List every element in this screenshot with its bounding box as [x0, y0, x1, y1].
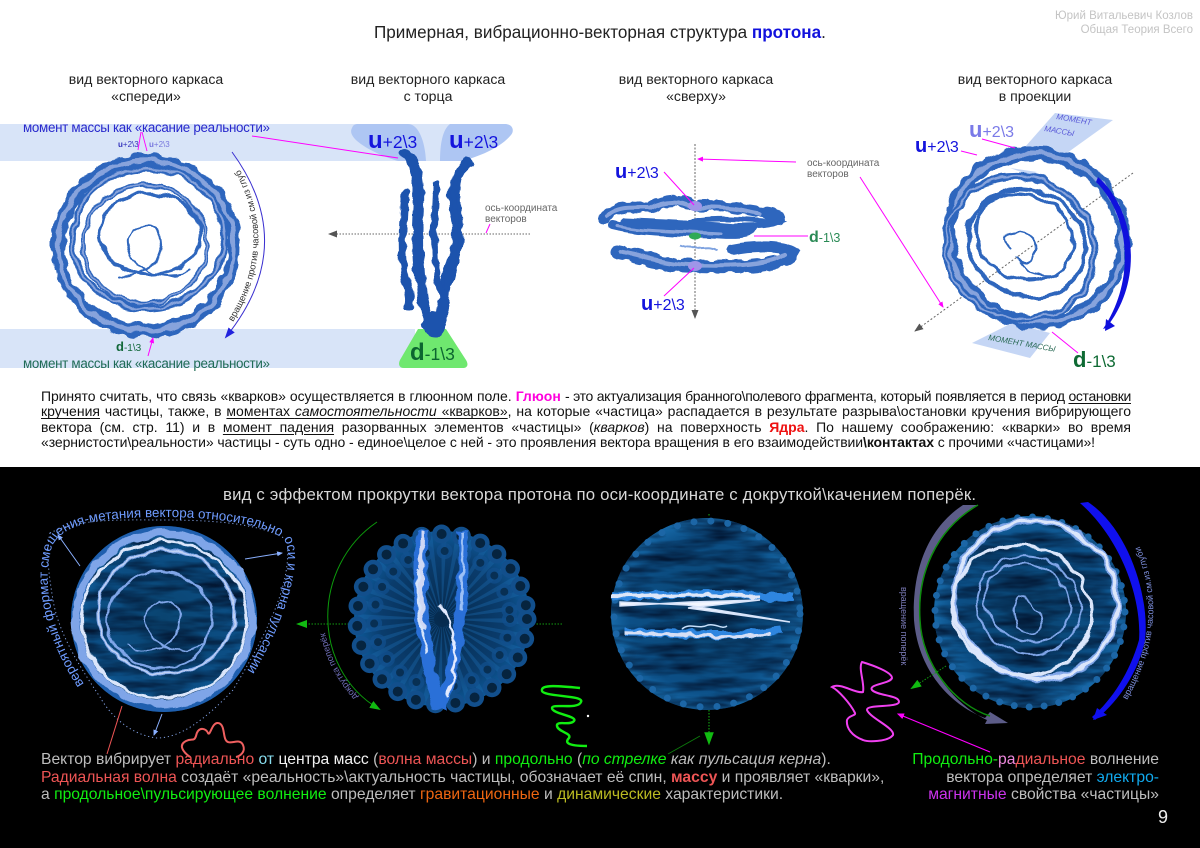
projection-view vector ring [921, 125, 1151, 351]
front-view quark annotations: u+2\3 [118, 140, 139, 149]
projection axis [915, 173, 1133, 331]
green axis arrow sphere 4 [912, 666, 946, 688]
explanatory paragraph: вектора (см. стр. 11) и в момент падения разорванных элементов «частицы» (кварков) на поверхность Ядра. По нашему соображению: «кварки» во время [41, 419, 1131, 435]
top-view quark markers [664, 172, 808, 296]
white dot [587, 715, 589, 717]
author credit [1055, 10, 1193, 36]
projection arrow tip [1105, 319, 1115, 331]
lower right explanation text: вектора определяет электро- [946, 769, 1159, 786]
column headings: с торца [404, 88, 453, 104]
front-view quark annotations: d-1\3 [116, 339, 142, 354]
top-view quark labels: u+2\3 [641, 293, 685, 315]
rotation label sphere 2: докрутка поперёк [320, 632, 360, 699]
side-view axis label [485, 203, 558, 233]
projection quark labels [915, 117, 1116, 372]
explanatory paragraph: «зернистости\реальности» частицы - суть одно - единое\целое с ней - это проявления вектора вращения в его взаимодействии\контактах с прочими «частицами»! [41, 434, 1095, 450]
black lower panel [0, 467, 1200, 848]
explanatory paragraph [41, 388, 1131, 450]
side-view axis [329, 233, 530, 235]
dark panel heading: вид с эффектом прокрутки вектора протона по оси-координате с докруткой\качением поперёк. [223, 485, 976, 504]
lower explanation text [41, 751, 884, 803]
blob: u quark right [440, 124, 513, 161]
top-view axis [694, 144, 696, 318]
projection mass-moment planes [972, 113, 1113, 358]
projection quark labels: u+2\3 [915, 135, 959, 157]
top-view quark labels: u+2\3 [615, 161, 659, 183]
blue rotation arrow sphere 4 [1080, 502, 1146, 720]
horizontal axis sphere 2 [298, 623, 562, 625]
column headings: вид векторного каркаса [958, 71, 1112, 87]
blob: d quark [399, 329, 467, 368]
projection plane labels [988, 112, 1093, 354]
lower right explanation text [912, 751, 1159, 803]
top-view quark labels [615, 161, 840, 315]
side-view vector strands [403, 154, 468, 333]
title: Примерная, вибрационно-векторная структура протона. [374, 23, 826, 42]
blue arrow label: вращение против часовой см.из глубины [1123, 546, 1154, 700]
band label bottom: момент массы как «касание реальности» [23, 356, 270, 371]
author credit: Общая Теория Всего [1081, 24, 1193, 36]
projection quark labels: d-1\3 [1073, 347, 1116, 372]
lower right explanation text: Продольно-радиальное волнение [912, 751, 1159, 768]
blue arrow tip [1093, 708, 1107, 720]
vibration-range pointers [58, 535, 282, 735]
explanatory paragraph: Принято считать, что связь «кварков» осуществляется в глюонном поле. Глюон - это актуализация бранного\полевого фрагмента, который появляется в период остановки [41, 388, 1131, 404]
projection rotation arrow [1096, 177, 1131, 329]
sphere 2: side-view scan [354, 530, 530, 708]
icon: electromagnetic wave [832, 662, 899, 741]
icon: longitudinal wave [542, 686, 587, 746]
front-view rotation arrow [226, 152, 265, 337]
vibration-range arc label: вероятный формат смещения-метания вектора относительно оси и керна пульсации [40, 510, 296, 687]
column headings: «спереди» [111, 88, 181, 104]
blob: u quark left [351, 124, 426, 161]
sphere 1: front-view scan [71, 526, 257, 712]
sphere 3: top-view scan [611, 518, 803, 710]
mass-moment bands [0, 124, 470, 368]
shared axis label with pointers: векторов [807, 169, 849, 180]
top-view quark labels: d-1\3 [809, 229, 840, 246]
shared axis label with pointers [698, 158, 943, 307]
side-view quark labels: u+2\3 [368, 127, 417, 154]
rotation arrow grey [914, 505, 1008, 724]
lower explanation text: Вектор вибрирует радиально от центра масс (волна массы) и продольно (по стрелке как пульсация керна). [41, 751, 831, 768]
column headings: «сверху» [666, 88, 726, 104]
page number: 9 [1158, 807, 1168, 827]
pointer to italic text [668, 736, 700, 754]
column headings: в проекции [999, 88, 1071, 104]
sphere 4: projection scan [929, 495, 1143, 708]
column headings: вид векторного каркаса [351, 71, 505, 87]
rotation arrow around sphere 2 [328, 522, 379, 709]
author credit: Юрий Витальевич Козлов [1055, 10, 1193, 22]
band label top: момент массы как «касание реальности» [23, 120, 270, 135]
column headings: вид векторного каркаса [619, 71, 773, 87]
shared axis label with pointers: ось-координата [807, 158, 880, 169]
top-view vector rings [604, 200, 793, 267]
lower explanation text: а продольное\пульсирующее волнение определяет гравитационные и динамические характеристики. [41, 786, 783, 803]
column headings: вид векторного каркаса [69, 71, 223, 87]
projection plane labels: МОМЕНТ [1056, 112, 1093, 127]
front-view quark annotations: u+2\3 [149, 140, 170, 149]
front-view vector ring [58, 161, 234, 331]
sphere 4 left label: вращение поперёк [899, 587, 909, 665]
explanatory paragraph: кручения частицы, также, в моментах самостоятельности «кварков», на которые «частица» распадается в результате разрыва\остановки кручения вибрирующего [41, 403, 1131, 419]
icon: radial wave [182, 723, 244, 757]
projection plane labels: МАССЫ [1044, 124, 1075, 138]
side-view axis label: векторов [485, 214, 527, 225]
projection plane labels: МОМЕНТ МАССЫ [988, 333, 1056, 354]
side-view quark labels: u+2\3 [449, 127, 498, 154]
em-wave pointer [898, 714, 990, 752]
column headings [69, 71, 1112, 104]
projection quark labels: u+2\3 [969, 117, 1014, 142]
lower explanation text: Радиальная волна создаёт «реальность»\актуальность частицы, обозначает её спин, массу и проявляет «кварки», [41, 769, 884, 786]
vibration-range dotted boundary [48, 520, 288, 738]
green edge of arrow [920, 505, 990, 716]
radial-wave pointer [107, 706, 122, 754]
side-view quark labels: d-1\3 [410, 339, 455, 366]
side-view quark labels [368, 127, 498, 366]
front-view quark annotations [116, 132, 398, 356]
side-view axis label: ось-координата [485, 203, 558, 214]
vertical axis sphere 3 [708, 514, 710, 743]
lower right explanation text: магнитные свойства «частицы» [928, 786, 1159, 803]
